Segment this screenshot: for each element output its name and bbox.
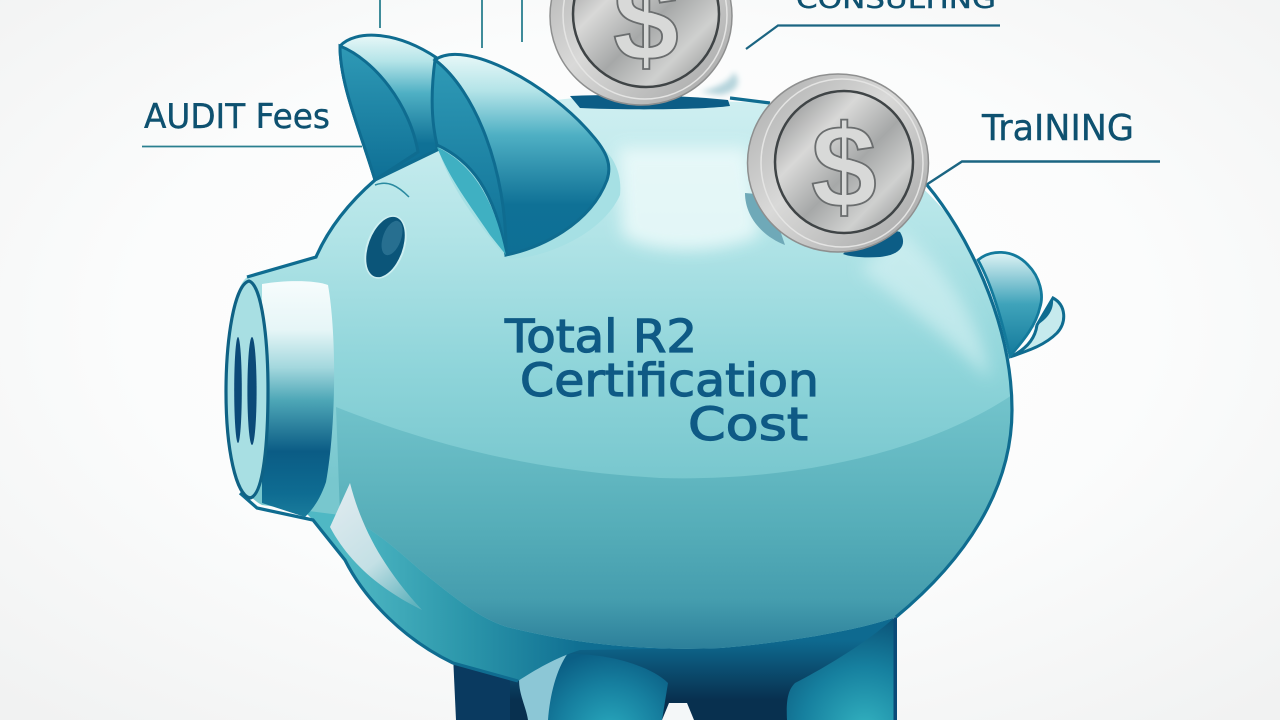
body lower shading — [336, 395, 1012, 649]
front ear — [432, 54, 609, 255]
back left leg — [453, 655, 530, 720]
callout: audit fees: AUDIT Fees — [144, 97, 330, 137]
right soft highlight — [860, 230, 990, 380]
center label: total cost: Certification — [520, 354, 819, 407]
coin slot — [570, 95, 730, 109]
body fill — [226, 97, 1012, 649]
coin: right — [748, 74, 928, 252]
coin: right: $ — [811, 101, 877, 233]
center label: total cost: Cost — [688, 398, 808, 451]
center label: total cost: Total R2 — [504, 310, 697, 363]
coin shadow: top — [700, 72, 738, 95]
body outline — [240, 98, 1012, 681]
center label: total cost — [504, 310, 819, 451]
under belly shadow — [510, 610, 893, 720]
snout side — [262, 281, 334, 517]
front leg — [535, 654, 668, 720]
piggy body — [226, 97, 1012, 681]
callout: top leader lines — [380, 0, 522, 48]
front ear halo — [437, 100, 620, 258]
callout: training: TraINING — [981, 108, 1134, 149]
tail bulb — [978, 252, 1042, 356]
snout — [226, 281, 334, 517]
coin shadows: right — [745, 193, 903, 257]
belly rim — [305, 480, 721, 681]
tail — [978, 252, 1064, 357]
ears — [340, 35, 620, 258]
tail curl — [1010, 298, 1064, 357]
body side glint — [330, 483, 422, 610]
gap between legs — [662, 703, 694, 720]
body top highlight — [618, 147, 760, 250]
nostrils — [234, 337, 242, 443]
coin: top — [550, 0, 732, 105]
callout: consulting — [746, 0, 1000, 49]
legs and underside — [453, 610, 897, 720]
eye — [356, 183, 415, 285]
back ear — [340, 35, 437, 180]
callout: training — [926, 108, 1160, 185]
right leg — [787, 617, 895, 720]
snout face — [226, 281, 268, 498]
front leg highlight — [519, 653, 568, 720]
